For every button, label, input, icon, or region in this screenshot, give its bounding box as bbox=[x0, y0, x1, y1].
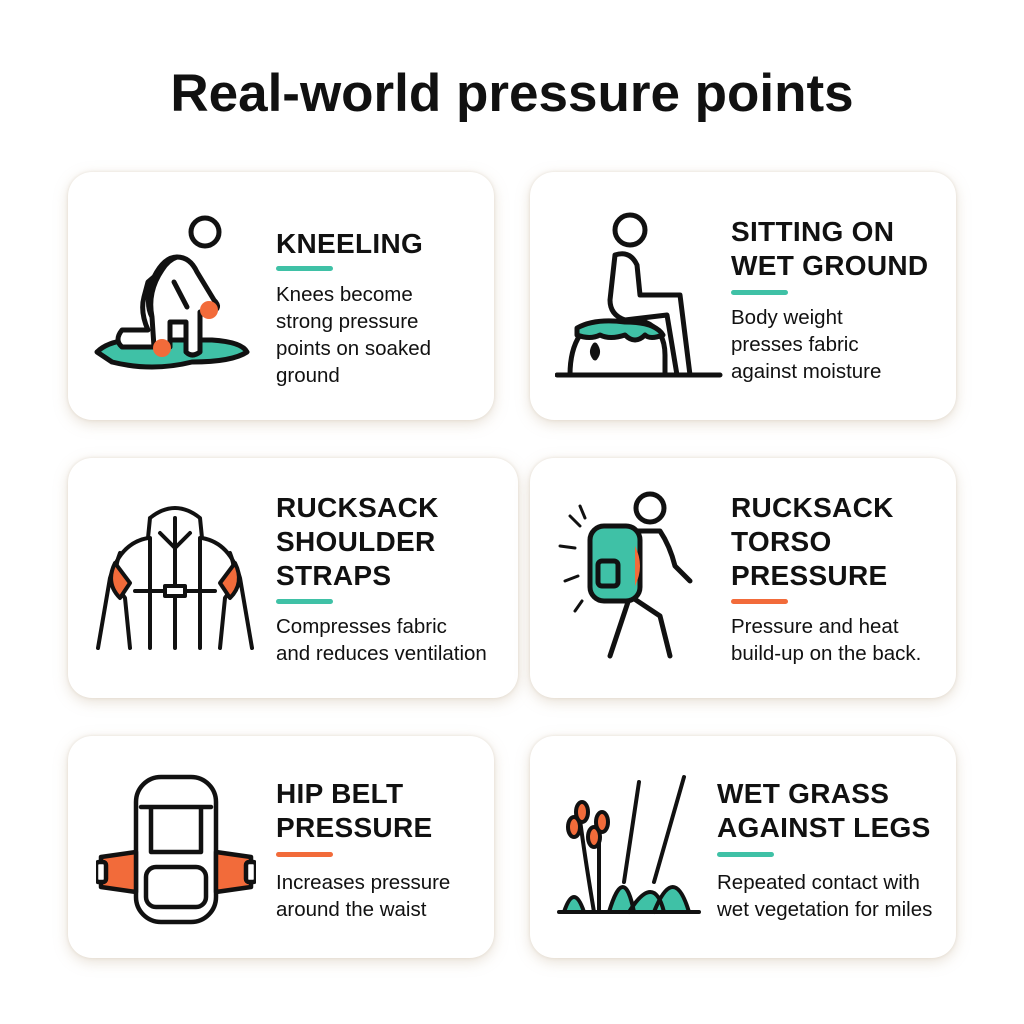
heading: TORSO bbox=[731, 526, 832, 557]
text: presses fabric bbox=[731, 333, 859, 356]
panel: hip belt pressure bbox=[68, 736, 494, 958]
panel: kneeling bbox=[68, 172, 494, 420]
panel: sitting on wet ground bbox=[530, 172, 956, 420]
text: Pressure and heat bbox=[731, 615, 899, 638]
panel: rucksack torso pressure bbox=[530, 458, 956, 698]
text: against moisture bbox=[731, 360, 881, 383]
icon: grass and legs bbox=[557, 775, 701, 914]
text bbox=[276, 615, 487, 665]
text bbox=[731, 615, 921, 665]
icon: hiker with backpack bbox=[558, 492, 692, 658]
heading bbox=[731, 216, 928, 281]
heading: HIP BELT bbox=[276, 778, 403, 809]
title: Real-world pressure points bbox=[170, 64, 854, 123]
heading: SHOULDER bbox=[276, 526, 436, 557]
heading: RUCKSACK bbox=[276, 492, 439, 523]
heading: WET GROUND bbox=[731, 250, 928, 281]
icon: kneeling person bbox=[94, 216, 250, 370]
text: build-up on the back. bbox=[731, 642, 921, 665]
heading: AGAINST LEGS bbox=[717, 812, 931, 843]
icon: backpack with hip belt bbox=[96, 774, 256, 924]
text: and reduces ventilation bbox=[276, 642, 487, 665]
heading bbox=[276, 492, 439, 591]
heading: KNEELING bbox=[276, 228, 423, 259]
accent bar bbox=[276, 599, 333, 604]
panel: rucksack shoulder straps bbox=[68, 458, 518, 698]
accent bar bbox=[276, 852, 333, 857]
panel: wet grass against legs bbox=[530, 736, 956, 958]
text: wet vegetation for miles bbox=[717, 898, 932, 921]
heading: PRESSURE bbox=[276, 812, 432, 843]
heading: WET GRASS bbox=[717, 778, 889, 809]
text: around the waist bbox=[276, 898, 426, 921]
heading bbox=[731, 492, 894, 591]
text: Repeated contact with bbox=[717, 871, 920, 894]
text: ground bbox=[276, 364, 340, 387]
heading: SITTING ON bbox=[731, 216, 894, 247]
text: strong pressure bbox=[276, 310, 418, 333]
text: Body weight bbox=[731, 306, 843, 329]
icon: jacket with straps bbox=[96, 506, 254, 650]
heading: STRAPS bbox=[276, 560, 391, 591]
text: points on soaked bbox=[276, 337, 431, 360]
accent bar bbox=[731, 290, 788, 295]
text bbox=[276, 283, 431, 387]
heading: PRESSURE bbox=[731, 560, 887, 591]
accent bar bbox=[731, 599, 788, 604]
text: Increases pressure bbox=[276, 871, 450, 894]
heading bbox=[276, 778, 432, 843]
text bbox=[731, 306, 881, 383]
text: Compresses fabric bbox=[276, 615, 447, 638]
text bbox=[276, 871, 450, 921]
accent bar bbox=[276, 266, 333, 271]
heading: RUCKSACK bbox=[731, 492, 894, 523]
heading bbox=[717, 778, 931, 843]
icon: sitting person bbox=[555, 212, 722, 378]
text: Knees become bbox=[276, 283, 413, 306]
accent bar bbox=[717, 852, 774, 857]
text bbox=[717, 871, 932, 921]
